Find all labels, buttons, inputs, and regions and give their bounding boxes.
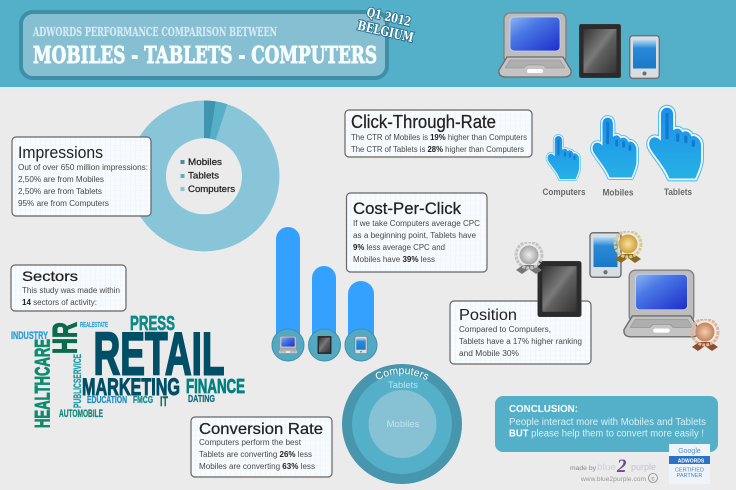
- hand labels: Computers: [542, 187, 586, 197]
- credit: blue2purple: purple: [631, 462, 656, 472]
- icon: hand tablets: [649, 108, 701, 178]
- panel: position: Compared to Computers,: [459, 325, 551, 334]
- panel: position: [450, 301, 591, 364]
- position podium devices: [516, 231, 718, 351]
- badge: google adwords certified partner: PARTNER: [677, 473, 702, 479]
- header devices: [499, 13, 659, 78]
- icon: bronze medal: [692, 319, 718, 351]
- bar: computers: [276, 227, 300, 345]
- credit: blue2purple: [570, 456, 658, 483]
- panel: position: and Mobile 30%: [459, 349, 519, 358]
- badge: laptop: [272, 329, 304, 361]
- word cloud: sectors: HEALTHCARE: [30, 339, 54, 428]
- panel: cost-per-click: If we take Computers average CPC: [353, 219, 480, 228]
- panel: sectors: 14 sectors of activity:: [22, 298, 97, 307]
- bar: mobiles: [348, 281, 374, 345]
- word cloud: sectors: HR: [46, 322, 84, 354]
- icon: laptop: [499, 13, 571, 77]
- header band: [0, 0, 736, 90]
- bar: tablets: [312, 266, 336, 345]
- conclusion panel: BUT please help them to convert more easily !: [509, 428, 704, 440]
- period stamp: [356, 3, 418, 46]
- panel: position: Tablets have a 17% higher ranking: [459, 337, 582, 346]
- word cloud: sectors: INDUSTRY: [11, 330, 48, 342]
- credit: blue2purple: 2: [616, 456, 627, 477]
- icon: laptop: [624, 270, 699, 337]
- legend: Tablets: [188, 170, 219, 182]
- legend: Mobiles: [188, 157, 222, 168]
- word cloud: sectors: PUBLICSERVICE: [72, 354, 84, 408]
- word cloud: sectors: [11, 312, 245, 428]
- period stamp: BELGIUM: [356, 19, 415, 46]
- badge: phone: [345, 329, 377, 361]
- word cloud: sectors: FINANCE: [186, 375, 245, 398]
- panel: cost-per-click: Cost-Per-Click: [353, 200, 462, 218]
- credit: blue2purple: blue: [597, 462, 616, 472]
- icon: phone: [630, 36, 659, 78]
- icon: silver medal: [516, 242, 542, 274]
- panel: click-through-rate: Click-Through-Rate: [351, 112, 496, 132]
- title panel: [21, 12, 387, 78]
- conclusion panel: [495, 396, 718, 452]
- concentric circles: conversion: Mobiles: [387, 419, 420, 430]
- word cloud: sectors: RETAIL: [94, 320, 224, 388]
- icon: hand mobiles: [593, 118, 636, 178]
- icon: tablet: [538, 261, 581, 317]
- panel: cost-per-click: 9% less average CPC and: [353, 243, 445, 252]
- title: MOBILES - TABLETS - COMPUTERS: [33, 42, 377, 69]
- panel: impressions: Impressions: [18, 144, 103, 162]
- credit: blue2purple: made by: [570, 465, 597, 472]
- badge: google adwords certified partner: ADWORDS: [678, 458, 705, 464]
- concentric circles: conversion: [342, 364, 462, 484]
- word cloud: sectors: AUTOMOBILE: [59, 408, 103, 420]
- word cloud: sectors: MARKETING: [82, 374, 180, 401]
- panel: sectors: [11, 265, 126, 311]
- badge: google adwords certified partner: Google: [678, 448, 701, 455]
- icon: phone: [590, 233, 621, 277]
- word cloud: sectors: REALESTATE: [80, 322, 108, 329]
- conclusion panel: People interact more with Mobiles and Tablets: [509, 417, 706, 428]
- concentric circles: conversion: Computers: [376, 368, 428, 380]
- donut chart: impressions: [128, 100, 280, 252]
- panel: click-through-rate: The CTR of Mobiles is 19% higher than Computers: [351, 133, 527, 142]
- panel: cost-per-click: [346, 193, 487, 272]
- panel: impressions: 2,50% are from Tablets: [18, 187, 102, 196]
- hand icons: click-through rate: [542, 108, 701, 198]
- hand labels: Tablets: [664, 187, 692, 197]
- hand labels: [542, 187, 692, 198]
- credit: blue2purple: www.blue2purple.com: [580, 476, 646, 483]
- word cloud: sectors: FMCG: [133, 395, 153, 406]
- panel: click-through-rate: [345, 110, 532, 157]
- panel: cost-per-click: Mobiles have 39% less: [353, 255, 435, 264]
- panel: click-through-rate: The CTR of Tablets is 28% higher than Computers: [351, 145, 524, 154]
- concentric circles: conversion: Tablets: [388, 380, 418, 391]
- bar chart: cost per click: [272, 227, 377, 361]
- badge: google adwords certified partner: [669, 444, 710, 484]
- subtitle: ADWORDS PERFORMANCE COMPARISON BETWEEN: [32, 25, 277, 39]
- icon: gold medal: [615, 231, 641, 263]
- panel: conversion rate: Mobiles are converting 63% less: [199, 462, 315, 471]
- hand labels: Mobiles: [602, 188, 634, 198]
- panel: impressions: [12, 137, 151, 216]
- panel: conversion rate: [191, 417, 332, 477]
- period stamp: Q1 2012: [365, 4, 413, 29]
- conclusion panel: CONCLUSION:: [509, 403, 578, 415]
- word cloud: sectors: DATING: [188, 394, 215, 405]
- word cloud: sectors: PRESS: [130, 312, 175, 335]
- panel: impressions: 2,50% are from Mobiles: [18, 175, 104, 184]
- icon: hand computers: [548, 136, 579, 179]
- legend: Computers: [188, 184, 235, 195]
- panel: impressions: Out of over 650 million impressions:: [18, 163, 148, 172]
- panel: cost-per-click: as a beginning point, Tablets have: [353, 231, 477, 240]
- panel: conversion rate: Conversion Rate: [199, 421, 323, 438]
- panel: sectors: This study was made within: [22, 286, 120, 295]
- icon: tablet: [579, 24, 621, 78]
- credit: blue2purple: c: [651, 476, 655, 482]
- word cloud: sectors: IT: [160, 393, 168, 409]
- panel: conversion rate: Tablets are converting 26% less: [199, 450, 312, 459]
- word cloud: sectors: EDUCATION: [87, 395, 127, 406]
- badge: google adwords certified partner: CERTIFIED: [675, 468, 704, 474]
- panel: sectors: Sectors: [22, 268, 78, 284]
- panel: conversion rate: Computers perform the best: [199, 438, 302, 447]
- panel: impressions: 95% are from Computers: [18, 199, 109, 208]
- badge: tablet: [308, 329, 340, 361]
- panel: position: Position: [459, 307, 517, 324]
- legend: [180, 157, 235, 195]
